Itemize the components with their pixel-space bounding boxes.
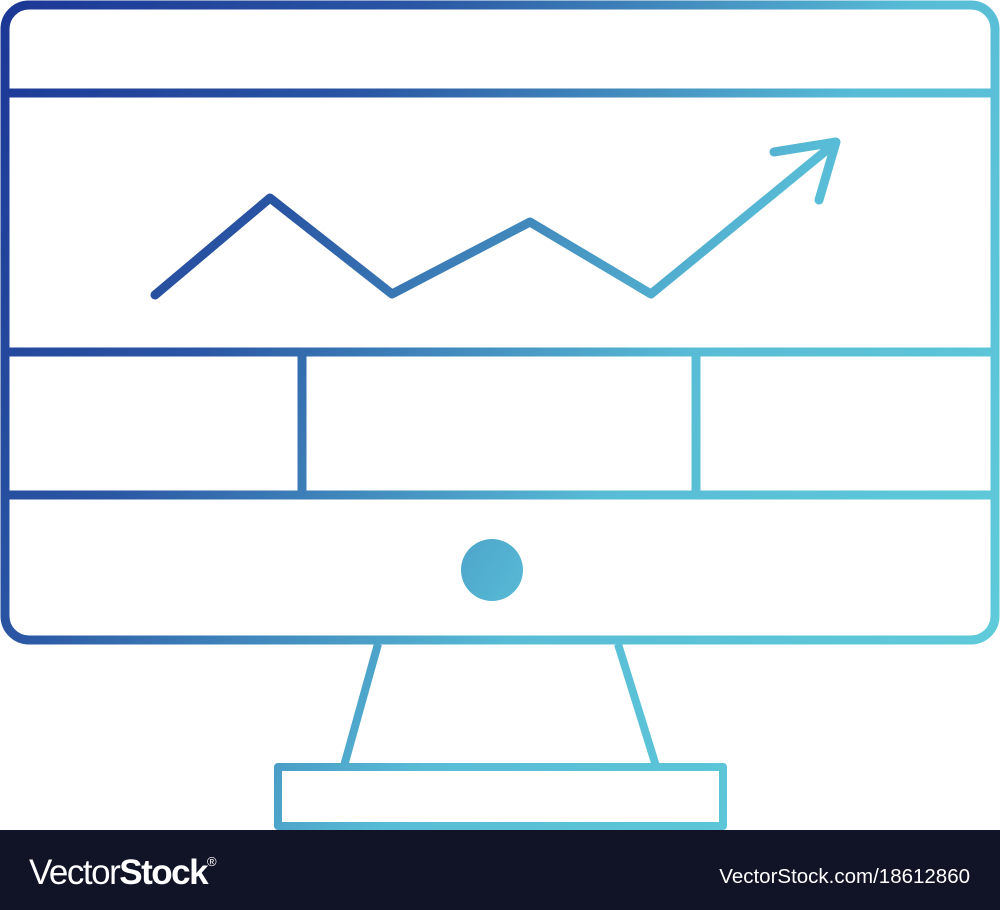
power button — [461, 539, 523, 601]
footer logo: ® — [207, 854, 217, 869]
footer bar — [0, 830, 1000, 910]
line chart with arrow — [155, 142, 836, 295]
monitor stand — [278, 644, 723, 826]
footer logo: VectorStock — [29, 853, 207, 892]
footer url: VectorStock.com/18612860 — [719, 865, 970, 888]
monitor screen frame — [5, 5, 995, 640]
